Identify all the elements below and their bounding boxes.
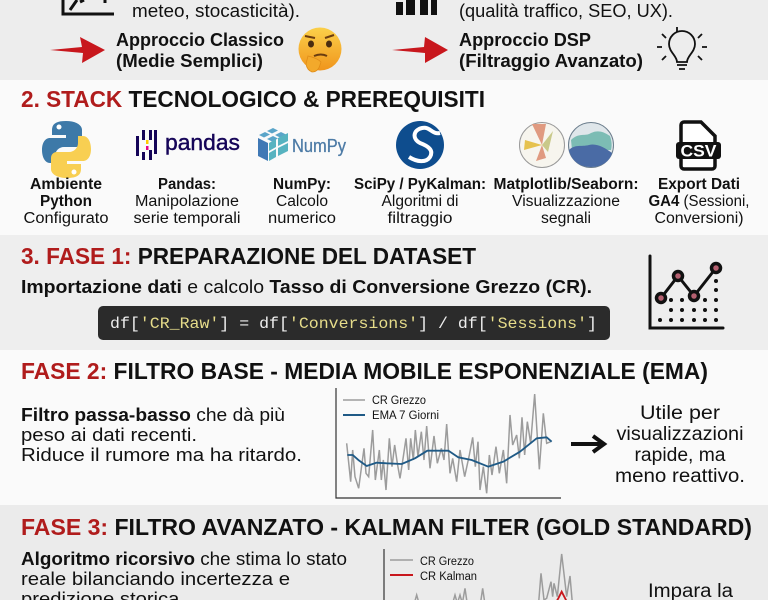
- text: numpy: Calcolo: [276, 193, 328, 210]
- text: phase 3 description: Algoritmo ricorsivo che stima lo stato: [21, 548, 347, 569]
- text: classic approach: Approccio Classico: [116, 29, 284, 50]
- text: scipy: [354, 176, 486, 227]
- chart legend: CR Grezzo: [372, 395, 426, 407]
- arrow: to DSP approach: [392, 37, 448, 63]
- icon: numpy logo: [258, 128, 346, 161]
- code block: [98, 306, 610, 340]
- text: phase 2 description: Filtro passa-basso che dà più: [21, 404, 285, 425]
- panel: problem and approaches: [50, 0, 707, 72]
- icon: bar chart: [396, 0, 437, 15]
- arrow: to classic approach: [50, 37, 105, 63]
- line chart: Kalman: [384, 549, 573, 600]
- text: numpy: numerico: [268, 210, 336, 227]
- text: EMA conclusion: [615, 403, 745, 487]
- text: python: Configurato: [24, 210, 108, 227]
- text: classic approach: (Medie Semplici): [116, 50, 263, 71]
- text: scipy: SciPy / PyKalman:: [354, 176, 486, 193]
- text: phase 2 description: [21, 404, 302, 465]
- text: EMA conclusion: visualizzazioni: [616, 424, 744, 445]
- text: scipy: filtraggio: [388, 210, 452, 227]
- chart legend: CR Grezzo: [420, 556, 474, 568]
- line chart: EMA: [336, 388, 561, 498]
- heading: stack: 2. STACK TECNOLOGICO & PREREQUISITI: [21, 86, 485, 112]
- text: python: [24, 176, 108, 227]
- text: EMA conclusion: rapide, ma: [634, 445, 726, 466]
- icon: numpy logo: NumPy: [292, 136, 346, 156]
- panel: phase 2: [21, 358, 745, 498]
- icon: python: [42, 121, 91, 178]
- text: phase 1 description: Importazione dati e calcolo Tasso di Conversione Grezzo (CR).: [21, 276, 592, 297]
- text: DSP approach: [459, 29, 643, 71]
- text: GA4 export: Export Dati: [658, 176, 740, 193]
- text: phase 3 description: reale bilanciando incertezza e: [21, 568, 290, 589]
- text: noise causes: meteo, stocasticità).: [132, 0, 300, 21]
- text: pandas: Manipolazione: [135, 193, 239, 210]
- heading: phase 1: 3. FASE 1: PREPARAZIONE DEL DATASET: [21, 243, 476, 269]
- heading: phase 2: FASE 2: FILTRO BASE - MEDIA MOBILE ESPONENZIALE (EMA): [21, 358, 708, 384]
- heading: phase 3: FASE 3: FILTRO AVANZATO - KALMAN FILTER (GOLD STANDARD): [21, 514, 752, 540]
- arrow: EMA conclusion: [571, 436, 604, 452]
- text: GA4 export: GA4 (Sessioni,: [648, 193, 750, 210]
- text: DSP approach: Approccio DSP: [459, 29, 591, 50]
- chart legend: [343, 395, 439, 422]
- icon: dot chart: [650, 256, 723, 328]
- text: DSP approach: (Filtraggio Avanzato): [459, 50, 643, 71]
- chart legend: EMA 7 Giorni: [372, 410, 439, 422]
- text: GA4 export: Conversioni): [654, 210, 744, 227]
- text: python: Ambiente: [30, 176, 102, 193]
- text: traffic causes: (qualità traffico, SEO, UX).: [459, 0, 673, 21]
- icon: CSV file: CSV: [680, 142, 717, 160]
- text: EMA conclusion: meno reattivo.: [615, 466, 745, 487]
- text: phase 3 description: [21, 548, 347, 600]
- panel: phase 3: [21, 514, 752, 600]
- text: numpy: NumPy:: [273, 176, 331, 193]
- text: visualization libraries: [494, 176, 638, 227]
- icon: noisy chart: [63, 0, 114, 14]
- text: scipy: Algoritmi di: [382, 193, 458, 210]
- icon: pandas logo: pandas: [165, 130, 240, 155]
- text: GA4 export: [648, 176, 750, 227]
- text: visualization libraries: segnali: [541, 210, 591, 227]
- text: visualization libraries: Visualizzazione: [512, 193, 620, 210]
- text: EMA conclusion: Utile per: [640, 403, 721, 424]
- text: phase 2 description: peso ai dati recenti.: [21, 424, 197, 445]
- text: pandas: Pandas:: [158, 176, 216, 193]
- chart legend: [390, 556, 477, 583]
- icon: thinking emoji: [298, 28, 342, 72]
- panel: stack: [21, 86, 750, 227]
- text: pandas: serie temporali: [134, 210, 240, 227]
- icon: CSV file: [676, 122, 721, 169]
- panel: phase 1: [21, 243, 723, 340]
- icon: light bulb: [657, 27, 707, 69]
- icon: pandas logo: [136, 130, 240, 160]
- icon: matplotlib and seaborn logos: [520, 122, 614, 168]
- text: classic approach: [116, 29, 284, 71]
- text: phase 2 description: Riduce il rumore ma ha ritardo.: [21, 444, 302, 465]
- text: python: Python: [40, 193, 92, 210]
- text: numpy: [268, 176, 336, 227]
- text: visualization libraries: Matplotlib/Seaborn:: [494, 176, 638, 193]
- text: pandas: [134, 176, 240, 227]
- code block: df['CR_Raw'] = df['Conversions' ] / df['Sessions']: [110, 315, 597, 333]
- chart legend: CR Kalman: [420, 571, 477, 583]
- icon: scipy logo: [396, 121, 444, 169]
